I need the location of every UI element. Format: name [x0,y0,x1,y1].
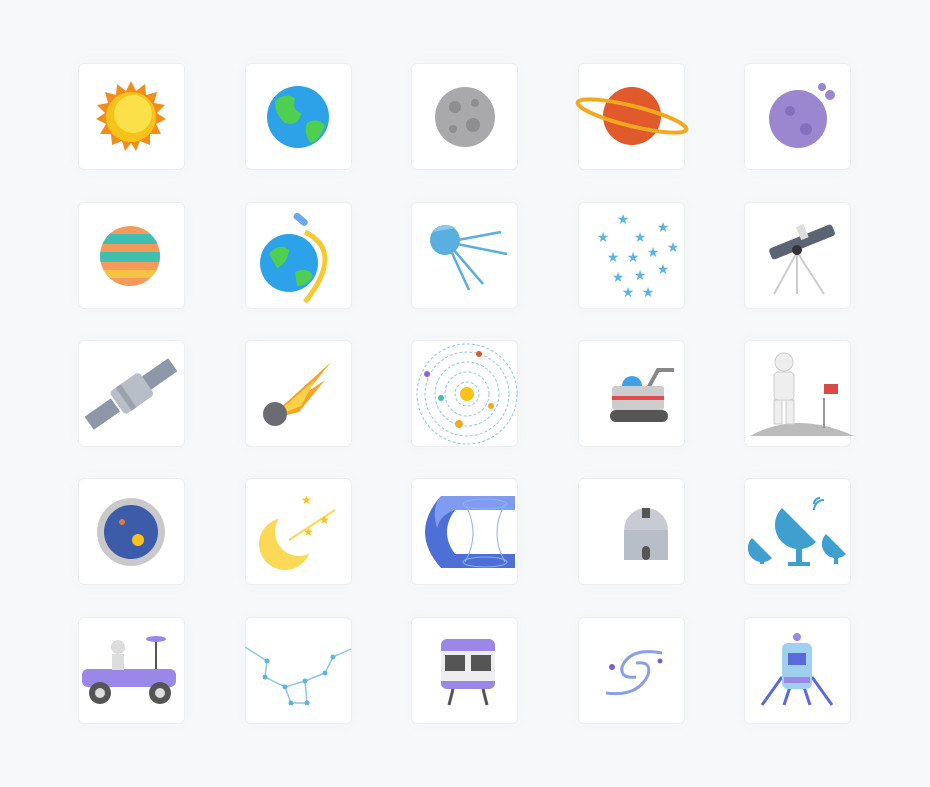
icon: wormhole [411,478,518,585]
icon: satellite [78,340,185,447]
icon: stars: ★ [617,211,629,227]
icon: radio telescopes [744,478,851,585]
icon: lunar lander [744,617,851,724]
icon: stars: ★ [634,229,646,245]
icon: telescope [744,202,851,309]
icon: solar system [411,340,518,447]
icon: stars [578,202,685,309]
icon: purple planet [744,63,851,170]
icon: stars: ★ [647,244,659,260]
icon: stars: ★ [597,229,609,245]
icon: constellation [245,617,352,724]
icon: earth [245,63,352,170]
icon: stars: ★ [657,219,669,235]
icon: crescent moon [245,478,352,585]
icon: stars: ★ [642,284,654,300]
icon: crescent moon: ★ [319,513,330,527]
icon: sputnik [411,202,518,309]
icon: astronaut [744,340,851,447]
icon: stars: ★ [607,249,619,265]
icon: galaxy [578,617,685,724]
icon: stars: ★ [634,267,646,283]
icon: porthole [78,478,185,585]
icon: crescent moon: ★ [301,493,312,507]
icon: lunar rover [78,617,185,724]
icon: observatory [578,478,685,585]
icon: rover [578,340,685,447]
icon: striped planet [78,202,185,309]
icon: stars: ★ [622,284,634,300]
icon: stars: ★ [612,269,624,285]
icon: stars: ★ [667,239,679,255]
icon: earth with rocket [245,202,352,309]
icon: meteor [245,340,352,447]
icon: saturn [578,63,685,170]
icon: sun [78,63,185,170]
icon: crescent moon: ★ [303,525,314,539]
icon: moon [411,63,518,170]
icon: stars: ★ [657,261,669,277]
icon: stars: ★ [627,249,639,265]
icon: capsule pod [411,617,518,724]
